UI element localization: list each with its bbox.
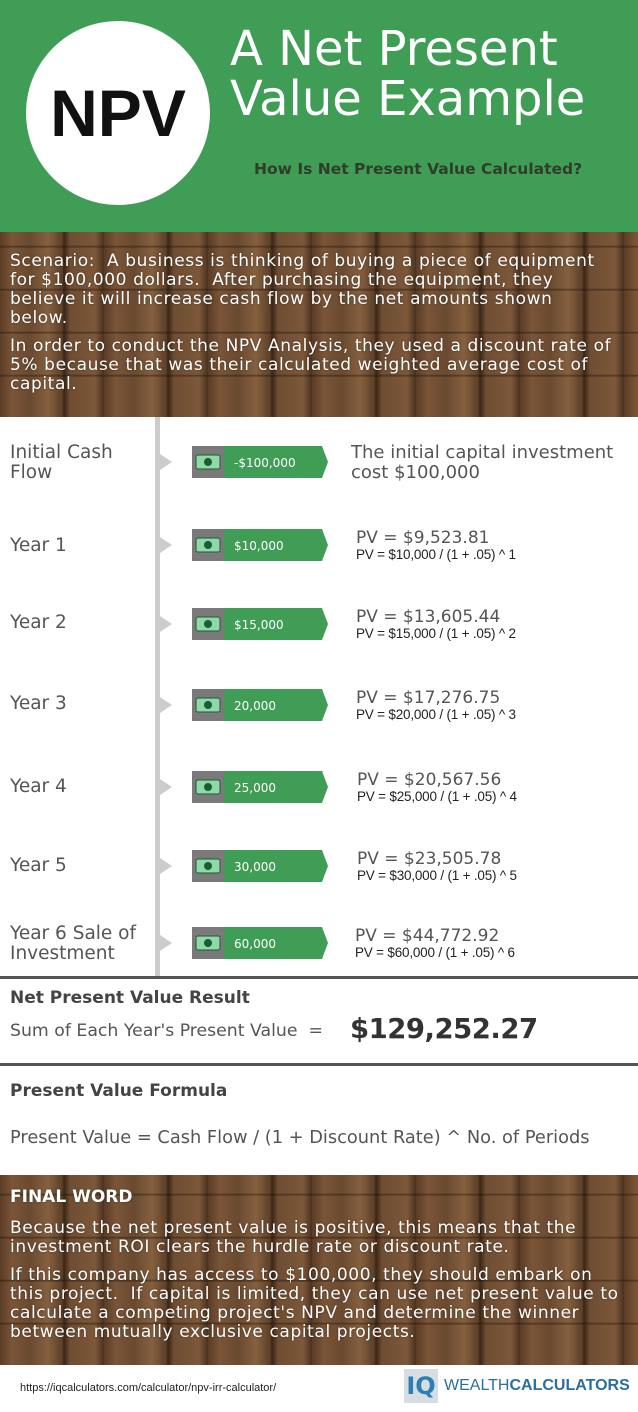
row: year 2 [10, 607, 516, 641]
title: Value Example [230, 71, 585, 127]
row: year 6: Year 6 Sale of [10, 923, 136, 944]
row: year 4 [10, 770, 517, 804]
row: initial: cost $100,000 [351, 462, 480, 483]
row: year 3 [10, 688, 516, 722]
row: year 1 [10, 528, 516, 562]
row: year 6 [10, 923, 515, 964]
footer logo [404, 1369, 630, 1403]
row: year 5 [10, 849, 517, 883]
formula heading: Present Value Formula [10, 1081, 227, 1101]
final word text [10, 1218, 619, 1342]
row: year 1: Year 1 [10, 535, 67, 556]
row: year 3: PV = $17,276.75 [356, 688, 500, 708]
row: year 6: Investment [10, 943, 115, 964]
row: year 6: PV = $44,772.92 [355, 926, 499, 946]
row: year 6: PV = $60,000 / (1 + .05) ^ 6 [355, 945, 515, 960]
row: year 5: PV = $30,000 / (1 + .05) ^ 5 [357, 868, 517, 883]
panel: scenario [0, 232, 638, 417]
row: year 2: PV = $13,605.44 [356, 607, 500, 627]
footer logo: IQ [406, 1372, 436, 1400]
title: A Net Present [230, 21, 558, 77]
final word heading: FINAL WORD [10, 1187, 132, 1207]
row: year 3: 20,000 [234, 699, 276, 713]
row: year 5: PV = $23,505.78 [357, 849, 501, 869]
formula text: Present Value = Cash Flow / (1 + Discount Rate) ^ No. of Periods [10, 1127, 590, 1148]
row: year 3: PV = $20,000 / (1 + .05) ^ 3 [356, 707, 516, 722]
big value: $129,252.27 [350, 1013, 538, 1045]
timeline [155, 417, 160, 976]
row: year 1: $10,000 [234, 539, 284, 553]
row: year 2: PV = $15,000 / (1 + .05) ^ 2 [356, 626, 516, 641]
row: year 2: $15,000 [234, 618, 284, 632]
panel: formula [10, 1081, 590, 1148]
scenario text: In order to conduct the NPV Analysis, they used a discount rate of 5% because that was their calculated weighted average cost of capital. [10, 336, 611, 394]
row: year 5: Year 5 [10, 855, 67, 876]
row: year 6: 60,000 [234, 937, 276, 951]
footer url: https://iqcalculators.com/calculator/npv-irr-calculator/ [20, 1382, 276, 1394]
row: year 1: PV = $9,523.81 [356, 528, 489, 548]
row: year 4: PV = $20,567.56 [357, 770, 501, 790]
scenario text: below. [10, 308, 68, 328]
row: initial: Initial Cash [10, 442, 113, 463]
panel: final word [0, 1175, 638, 1365]
logo circle NPV: NPV [50, 76, 186, 150]
result heading: Net Present Value Result [10, 988, 250, 1008]
sum text: Sum of Each Year's Present Value = [10, 1021, 323, 1041]
row: year 1: PV = $10,000 / (1 + .05) ^ 1 [356, 547, 516, 562]
logo circle NPV [26, 21, 210, 205]
row: year 2: Year 2 [10, 612, 67, 633]
row: year 3: Year 3 [10, 693, 67, 714]
row: initial: Flow [10, 462, 52, 483]
panel: NPV result [10, 988, 538, 1045]
row: year 5: 30,000 [234, 860, 276, 874]
row: initial: -$100,000 [234, 456, 296, 470]
scenario text: Scenario: A business is thinking of buying a piece of equipment for $100,000 dollars. After purchasing the equipment, they believe it will increase cash flow by the net amounts shown [10, 251, 595, 309]
row: year 4: Year 4 [10, 776, 67, 797]
subtitle: How Is Net Present Value Calculated? [254, 160, 582, 178]
row: initial: The initial capital investment [351, 442, 613, 463]
row: year 4: PV = $25,000 / (1 + .05) ^ 4 [357, 789, 517, 804]
footer logo: WEALTHCALCULATORS [444, 1377, 630, 1394]
title [230, 21, 585, 127]
final word text: If this company has access to $100,000, they should embark on this project. If capital is limited, they can use net present value to calculate a competing project's NPV and determine the winner between mutually exclusive capital projects. [10, 1265, 619, 1342]
scenario text [10, 251, 612, 394]
final word text: Because the net present value is positive, this means that the investment ROI clears the hurdle rate or discount rate. [10, 1218, 576, 1257]
header [0, 0, 638, 232]
row: year 4: 25,000 [234, 781, 276, 795]
row: initial [10, 442, 613, 483]
